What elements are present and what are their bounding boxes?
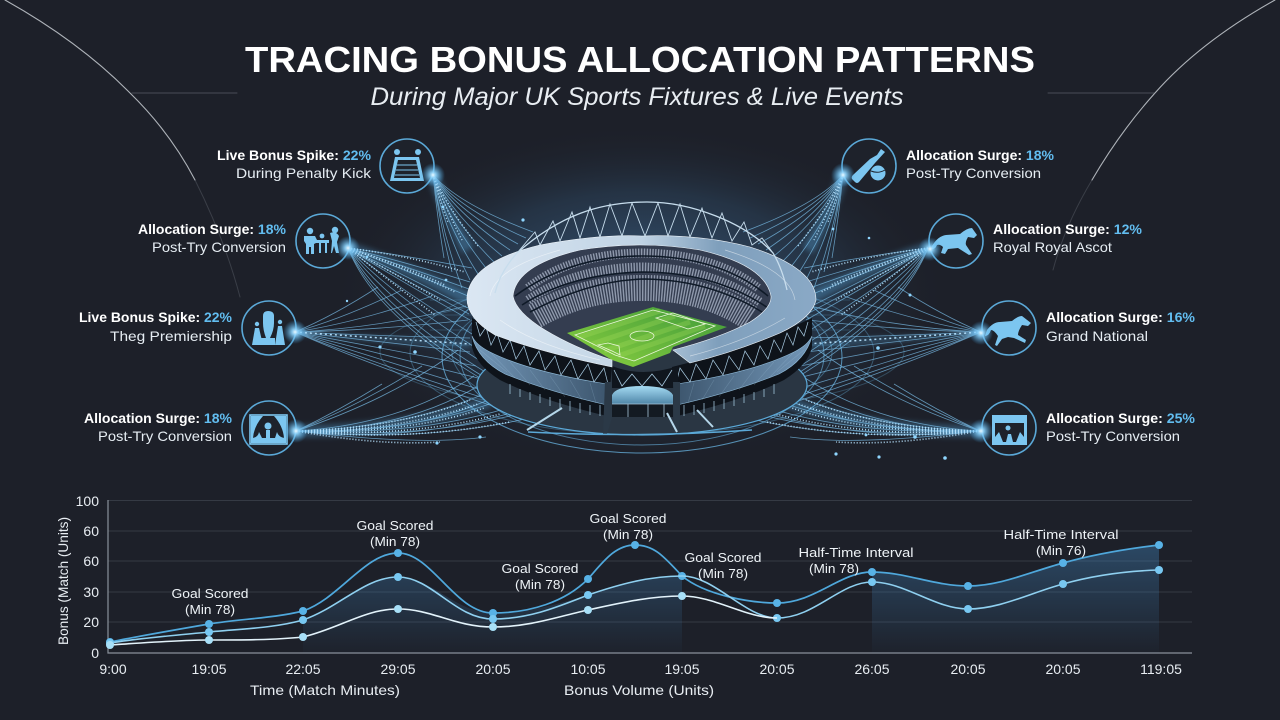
x axis titles: Time (Match Minutes) bbox=[250, 682, 400, 698]
subtitle: During Major UK Sports Fixtures & Live Events bbox=[370, 83, 904, 111]
chart annotations: (Min 78) bbox=[370, 534, 420, 549]
y axis labels: 20 bbox=[83, 614, 99, 630]
icon: horse bbox=[985, 316, 1031, 346]
item: left 4 bbox=[84, 401, 308, 455]
fan: node 2 bbox=[348, 248, 522, 402]
item: left 1 bbox=[217, 139, 445, 193]
item: left 4: Post-Try Conversion bbox=[98, 428, 232, 444]
item: left 2 bbox=[138, 214, 360, 268]
item: right 4 bbox=[969, 401, 1196, 455]
icon: microphone trophy bbox=[252, 311, 285, 345]
icon: stage frame bbox=[250, 415, 287, 444]
x axis labels: 20:05 bbox=[1045, 661, 1081, 677]
chart annotations: Goal Scored bbox=[590, 511, 666, 526]
roof detail lines bbox=[490, 250, 795, 360]
floating particles bbox=[346, 206, 947, 460]
chart annotations: Goal Scored bbox=[502, 561, 578, 576]
item: right 1: Post-Try Conversion bbox=[906, 165, 1041, 181]
label: Live Bonus Spike: 22% bbox=[79, 309, 233, 325]
chart annotations: Goal Scored bbox=[356, 518, 434, 533]
concentric rings around stadium bbox=[380, 261, 904, 453]
line chart bbox=[55, 493, 1192, 698]
central glow bbox=[330, 123, 950, 467]
item: right 1 bbox=[831, 139, 1055, 193]
item: right 3 bbox=[969, 301, 1196, 355]
item: left 3: Theg Premiership bbox=[110, 328, 232, 344]
item: right 2: Royal Royal Ascot bbox=[993, 239, 1112, 255]
item: right 3: Grand National bbox=[1046, 328, 1148, 344]
y axis labels: 0 bbox=[91, 645, 99, 661]
y axis labels: 100 bbox=[76, 493, 99, 509]
label: Allocation Surge: 18% bbox=[138, 221, 287, 237]
roof ring bbox=[467, 236, 816, 367]
fan: node 3 bbox=[295, 287, 542, 422]
stadium ground bbox=[477, 335, 807, 435]
x axis labels: 10:05 bbox=[570, 661, 606, 677]
chart annotations: Half-Time Interval bbox=[798, 545, 914, 560]
x axis labels: 19:05 bbox=[191, 661, 227, 677]
label: Allocation Surge: 12% bbox=[993, 221, 1143, 237]
pitch bbox=[567, 307, 727, 367]
grid lines bbox=[108, 500, 1192, 622]
x axis labels: 119:05 bbox=[1140, 661, 1182, 677]
label: Live Bonus Spike: 22% bbox=[217, 147, 372, 163]
x axis labels: 22:05 bbox=[285, 661, 321, 677]
network fans left bbox=[295, 175, 558, 443]
chart annotations: Half-Time Interval bbox=[1004, 527, 1119, 542]
chart annotations: (Min 78) bbox=[603, 527, 653, 542]
icon: horse bbox=[931, 228, 977, 255]
x axis labels: 29:05 bbox=[380, 661, 416, 677]
fan: node 1 bbox=[433, 175, 533, 288]
x axis labels: 20:05 bbox=[759, 661, 795, 677]
label: Allocation Surge: 16% bbox=[1046, 309, 1196, 325]
item: left 2: Post-Try Conversion bbox=[152, 239, 286, 255]
icon: people at table bbox=[304, 227, 339, 254]
item: left 3 bbox=[79, 301, 307, 355]
label: Allocation Surge: 18% bbox=[906, 147, 1055, 163]
y axis title: Bonus (Match (Units) bbox=[55, 517, 71, 645]
fan: node 4 bbox=[296, 350, 558, 443]
x axis labels bbox=[99, 661, 1182, 677]
chart annotations: (Min 78) bbox=[809, 561, 859, 576]
seating bowl bbox=[513, 245, 771, 362]
chart annotations: Goal Scored bbox=[172, 586, 248, 601]
chart annotations: Goal Scored bbox=[684, 550, 762, 565]
line chart: Bonus Volume (Units) bbox=[564, 682, 714, 698]
label: Allocation Surge: 25% bbox=[1046, 410, 1196, 426]
item: right 4: Post-Try Conversion bbox=[1046, 428, 1180, 444]
x axis labels: 19:05 bbox=[664, 661, 700, 677]
label: Allocation Surge: 18% bbox=[84, 410, 233, 426]
x axis labels: 20:05 bbox=[950, 661, 986, 677]
series 1 bbox=[106, 541, 1163, 646]
chart annotations: (Min 76) bbox=[1036, 543, 1086, 558]
item: right 2 bbox=[918, 214, 1143, 268]
chart annotations: (Min 78) bbox=[185, 602, 235, 617]
y axis labels bbox=[76, 493, 99, 661]
stadium lower side left bbox=[472, 318, 612, 416]
y axis labels: 60 bbox=[83, 553, 99, 569]
icon: screen frame bbox=[992, 415, 1027, 445]
series 3 bbox=[106, 592, 777, 649]
title: TRACING BONUS ALLOCATION PATTERNS bbox=[245, 39, 1035, 80]
icon: tactics board bbox=[390, 149, 424, 181]
chart annotations: (Min 78) bbox=[515, 577, 565, 592]
chart annotations: (Min 78) bbox=[698, 566, 748, 581]
axes bbox=[108, 500, 1192, 653]
y axis labels: 30 bbox=[83, 584, 99, 600]
series 2 bbox=[106, 566, 1163, 647]
area fill bbox=[303, 545, 1159, 653]
roof arch truss bbox=[495, 202, 787, 293]
corner arcs bbox=[5, 0, 1275, 297]
network fans right bbox=[718, 175, 981, 443]
x axis labels: 20:05 bbox=[475, 661, 511, 677]
icon: cricket bat and ball bbox=[852, 149, 886, 183]
central entrance bbox=[527, 366, 752, 435]
chart annotations bbox=[172, 511, 1119, 617]
x axis labels: 9:00 bbox=[99, 661, 127, 677]
stadium lower side right bbox=[672, 318, 812, 416]
fan glow bands bbox=[295, 175, 490, 431]
stadium bbox=[467, 202, 816, 435]
y axis labels: 60 bbox=[83, 523, 99, 539]
x axis labels: 26:05 bbox=[854, 661, 890, 677]
item: left 1: During Penalty Kick bbox=[236, 165, 372, 181]
